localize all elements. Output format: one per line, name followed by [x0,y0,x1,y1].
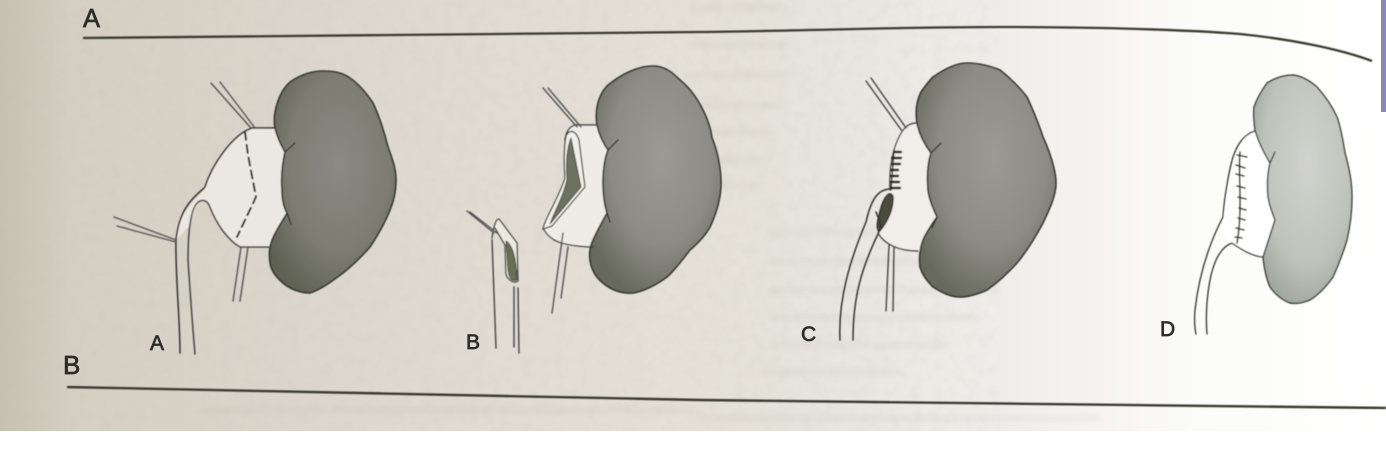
hilum creases A [285,143,295,224]
hilum crease D [1270,152,1275,163]
kidney C [916,63,1056,297]
kidney A [269,71,396,293]
show-through text from the reverse page [200,8,1100,418]
suture line D [1235,152,1247,243]
kidney B [590,66,721,293]
hilum creases B [607,140,618,222]
clamps C [866,78,906,311]
label A: A [150,332,164,355]
clamps B [467,88,581,313]
section heading: A: A [83,3,101,33]
incision dashes A [237,132,256,237]
section heading: B: B [63,350,80,380]
section rule: A [83,27,1372,61]
label B: B [466,331,480,354]
panel: figure B [467,66,721,353]
panel: figure C [840,63,1056,340]
kidney D [1254,75,1352,303]
pelvis and ureter outline A [176,128,275,353]
hilum creases C [931,143,941,228]
label D: D [1160,318,1175,341]
pelvis A [176,128,293,247]
pelvis D [1223,130,1275,257]
pelvis incision flap B [543,131,585,229]
open ureter anastomosis C [877,194,893,232]
label C: C [801,323,816,346]
ureter stump B [492,219,518,282]
panel: figure D [1195,75,1352,334]
suture line C [891,150,901,190]
paper grain [0,0,1000,431]
pelvis B [544,125,617,247]
pelvis and ureter outline D [1195,131,1255,334]
panel: figure A [114,71,396,354]
page edge strip [1381,0,1386,112]
clamps A [114,82,255,301]
section rule: B [67,387,1386,408]
pelvis C [878,123,940,251]
pelvis outline C [878,123,918,251]
